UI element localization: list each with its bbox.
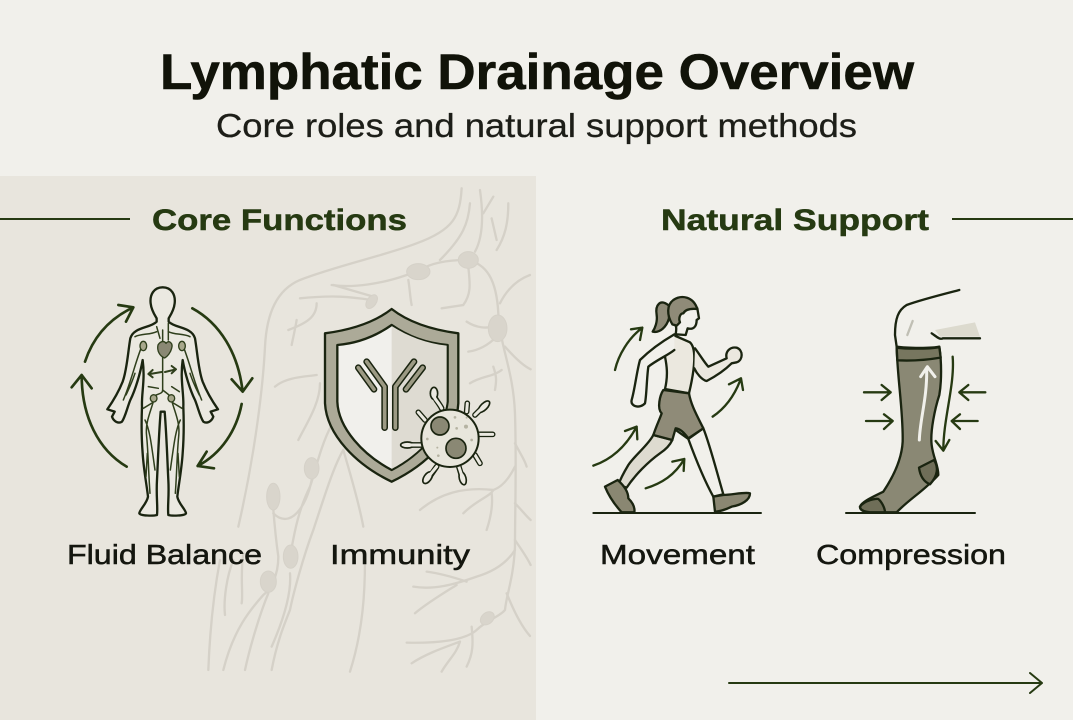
antibody: [358, 362, 423, 428]
rear leg: [618, 435, 672, 488]
downward flow arrow: [936, 357, 953, 451]
icon: compression sock: [846, 290, 985, 513]
title: Lymphatic Drainage Overview: [160, 44, 914, 100]
front arm: [694, 348, 742, 381]
rear arm: [631, 334, 674, 407]
arrow: bottom right pointer: [729, 673, 1042, 693]
ground line: [593, 510, 761, 516]
heel patch: [919, 460, 937, 484]
lymphatic network background illustration: [208, 188, 531, 672]
torso: [665, 335, 694, 393]
front leg: [676, 428, 723, 497]
subtitle: Core roles and natural support methods: [216, 107, 857, 144]
back of thigh: [935, 322, 980, 337]
head: [673, 308, 699, 335]
sock body: [860, 347, 941, 512]
hair: [668, 297, 697, 326]
icon: body with circulation arrows: [72, 287, 252, 516]
lymph nodes and heart: [140, 341, 185, 402]
panel: core functions background: [0, 176, 536, 720]
shorts: [653, 390, 703, 440]
knee and thigh: [895, 290, 959, 347]
label: movement: Movement: [600, 539, 755, 570]
body outline: [107, 287, 218, 516]
icon: shield with antibody and pathogen: [325, 309, 493, 486]
rear shoe: [605, 480, 634, 512]
front shoe: [713, 493, 750, 512]
heading: natural support: Natural Support: [661, 204, 929, 237]
ponytail: [653, 303, 669, 332]
label: compression: Compression: [816, 539, 1006, 570]
icon: walking woman with motion arrows: [593, 297, 761, 513]
toe patch: [860, 499, 885, 512]
pathogen: [401, 387, 493, 486]
label: fluid balance: Fluid Balance: [67, 539, 262, 570]
sock cuff: [897, 347, 941, 361]
heading: core functions: Core Functions: [152, 204, 407, 237]
circular arrows: [72, 305, 252, 468]
white upward arrow: [919, 367, 935, 440]
thigh underside: [932, 333, 980, 339]
vessels: [123, 323, 202, 493]
shield: [325, 309, 458, 482]
label: immunity: Immunity: [330, 539, 470, 570]
compression arrows: [864, 385, 985, 429]
ground line: [846, 510, 975, 516]
motion arrows: [593, 328, 743, 488]
